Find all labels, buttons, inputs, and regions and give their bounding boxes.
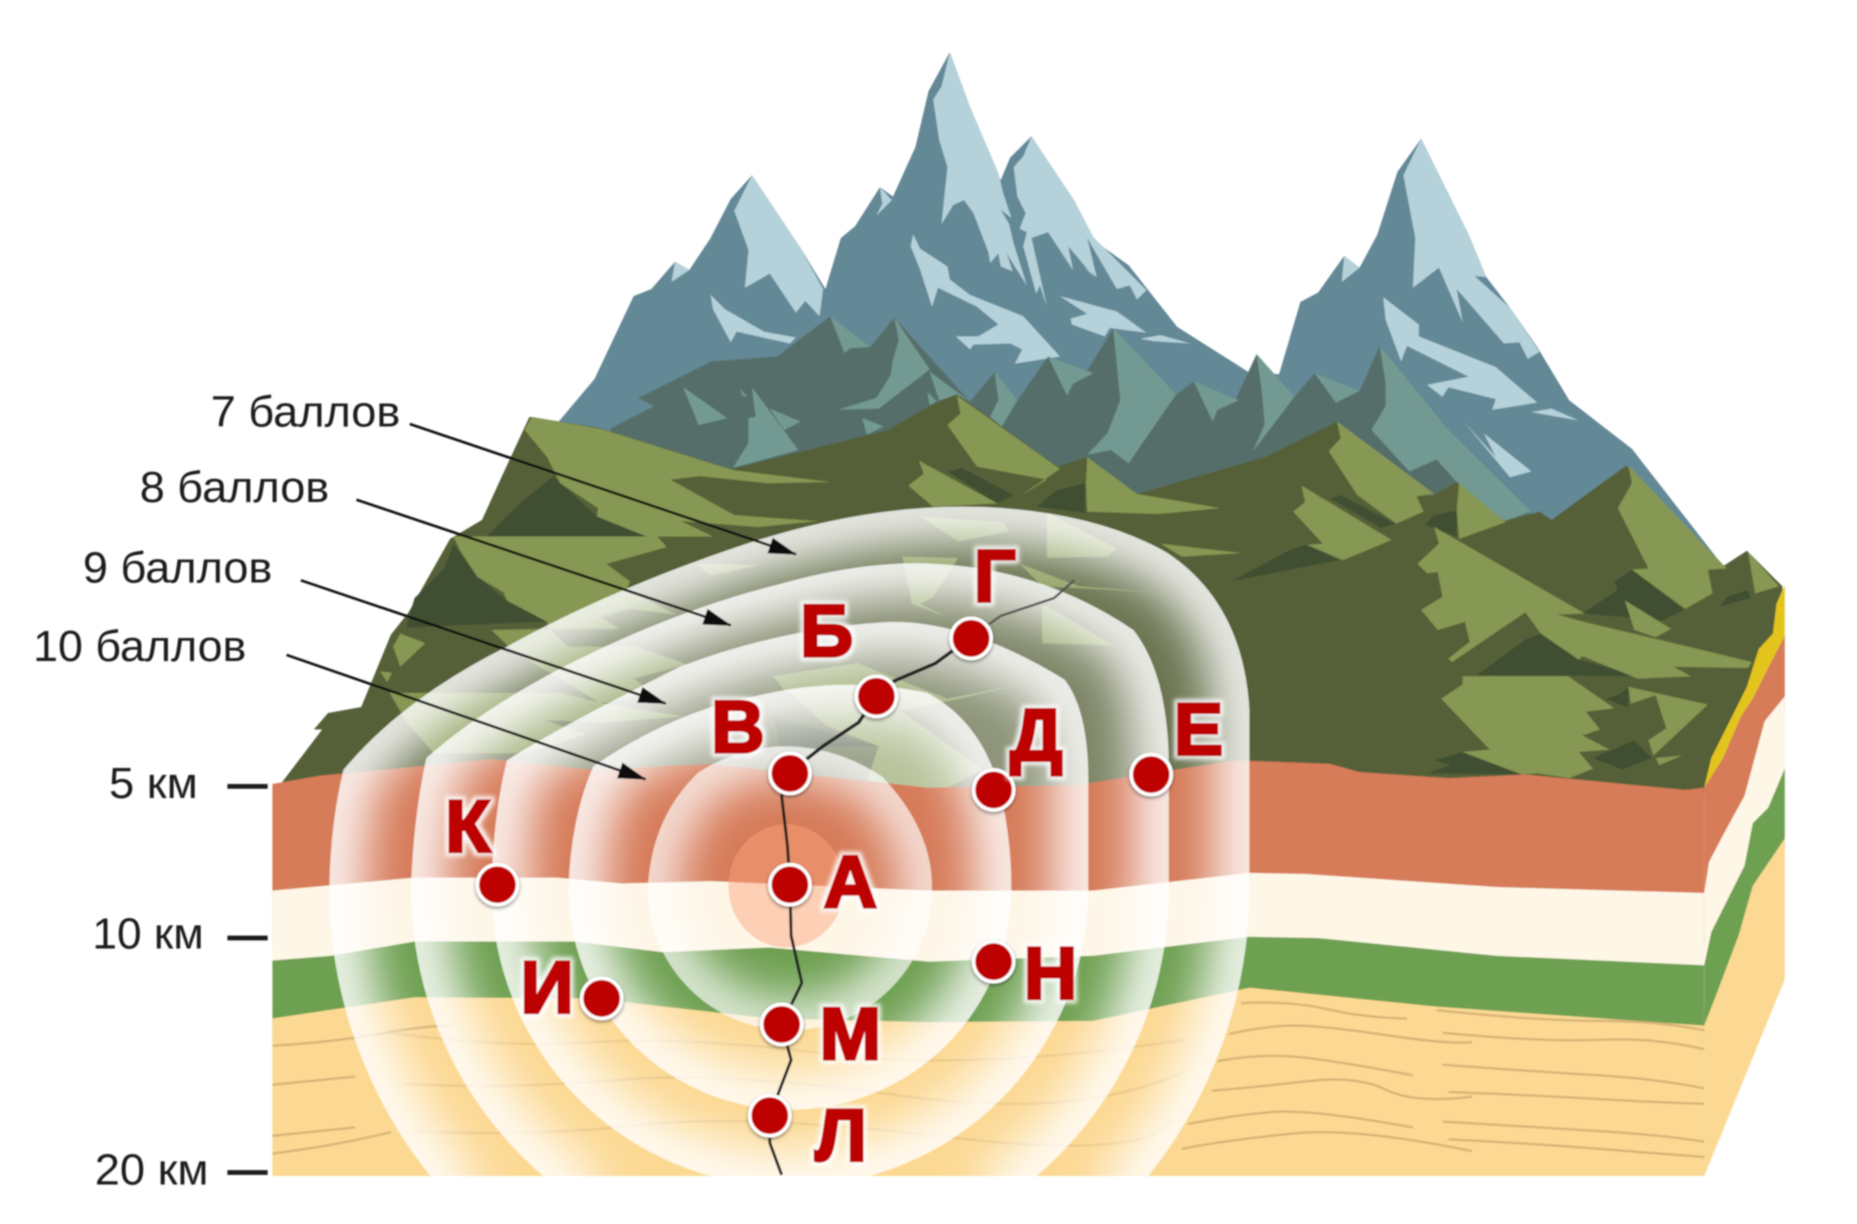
- letter М: М: [820, 993, 881, 1075]
- intensity zones: [329, 507, 1249, 1208]
- arrow 10: [287, 655, 645, 779]
- fault line: [770, 580, 1074, 1175]
- arrow 8: [356, 500, 731, 625]
- dot Н: [974, 942, 1014, 982]
- middle teal range: [610, 316, 1531, 616]
- label 10: 10 баллов: [33, 622, 246, 671]
- zone ring 10: [568, 685, 1011, 1110]
- mountain silhouette: [557, 52, 1723, 663]
- middle fault: [790, 637, 971, 772]
- zone ring 9: [491, 622, 1088, 1187]
- arrow 7: [410, 424, 796, 554]
- location dots: [477, 618, 1171, 1136]
- dome washes on the ground surface: [374, 527, 1230, 788]
- inner zone ring: [648, 746, 932, 1030]
- snow caps: [672, 52, 1579, 477]
- front: terracotta layer: [272, 759, 1704, 947]
- dot Г: [951, 618, 991, 658]
- front green range: [281, 394, 1782, 805]
- letter Б: Б: [800, 590, 853, 672]
- sand strata lines: [272, 1003, 1704, 1157]
- letter Е: Е: [1174, 688, 1223, 770]
- epicentre core: [728, 824, 844, 947]
- side face: cream: [1704, 696, 1785, 965]
- arrow 9: [301, 580, 666, 703]
- tick marks: [227, 786, 268, 1172]
- dot Б: [856, 676, 897, 717]
- side face: sand: [1704, 838, 1785, 1176]
- lower fault: [770, 772, 802, 1175]
- dot М: [762, 1004, 802, 1045]
- letter Г: Г: [974, 536, 1016, 618]
- side face: terracotta: [1704, 636, 1785, 893]
- dot В: [770, 753, 810, 793]
- upper fault: [971, 580, 1074, 637]
- back mountain range: [557, 52, 1723, 663]
- light green faces: [380, 396, 1779, 788]
- depth scale: [92, 759, 268, 1194]
- front: cream layer: [272, 873, 1704, 1007]
- intensity labels: [33, 387, 400, 671]
- darkest shadows: [406, 468, 1750, 775]
- depth 5: 5 км: [109, 759, 198, 808]
- depth 10: 10 км: [92, 910, 204, 959]
- letter Д: Д: [1010, 694, 1062, 776]
- dot И: [581, 978, 622, 1019]
- location letters: [445, 536, 1223, 1177]
- green silhouette: [281, 394, 1782, 805]
- zone ring 7: [329, 507, 1249, 1208]
- letter К: К: [445, 786, 490, 868]
- dot Е: [1131, 754, 1171, 795]
- teal silhouette: [610, 316, 1531, 616]
- zone ring 8: [411, 563, 1169, 1208]
- teal light faces: [683, 316, 1531, 521]
- letter Л: Л: [815, 1095, 867, 1177]
- dot К: [477, 865, 518, 905]
- letter А: А: [824, 841, 877, 923]
- dot А: [770, 865, 810, 905]
- letter И: И: [521, 947, 574, 1029]
- label 7: 7 баллов: [211, 387, 400, 436]
- depth 20: 20 км: [95, 1145, 208, 1194]
- rock strata block: [272, 585, 1785, 1176]
- dot Д: [974, 770, 1014, 810]
- front: green layer: [272, 937, 1704, 1042]
- front: sand layer: [272, 988, 1704, 1176]
- arrows: [287, 424, 796, 779]
- label 9: 9 баллов: [83, 544, 272, 593]
- label 8: 8 баллов: [140, 463, 329, 512]
- side face: yellow strip: [1704, 585, 1785, 788]
- letter В: В: [711, 686, 764, 768]
- letter Н: Н: [1024, 932, 1077, 1014]
- side face: green: [1704, 769, 1785, 1026]
- dot Л: [750, 1095, 790, 1136]
